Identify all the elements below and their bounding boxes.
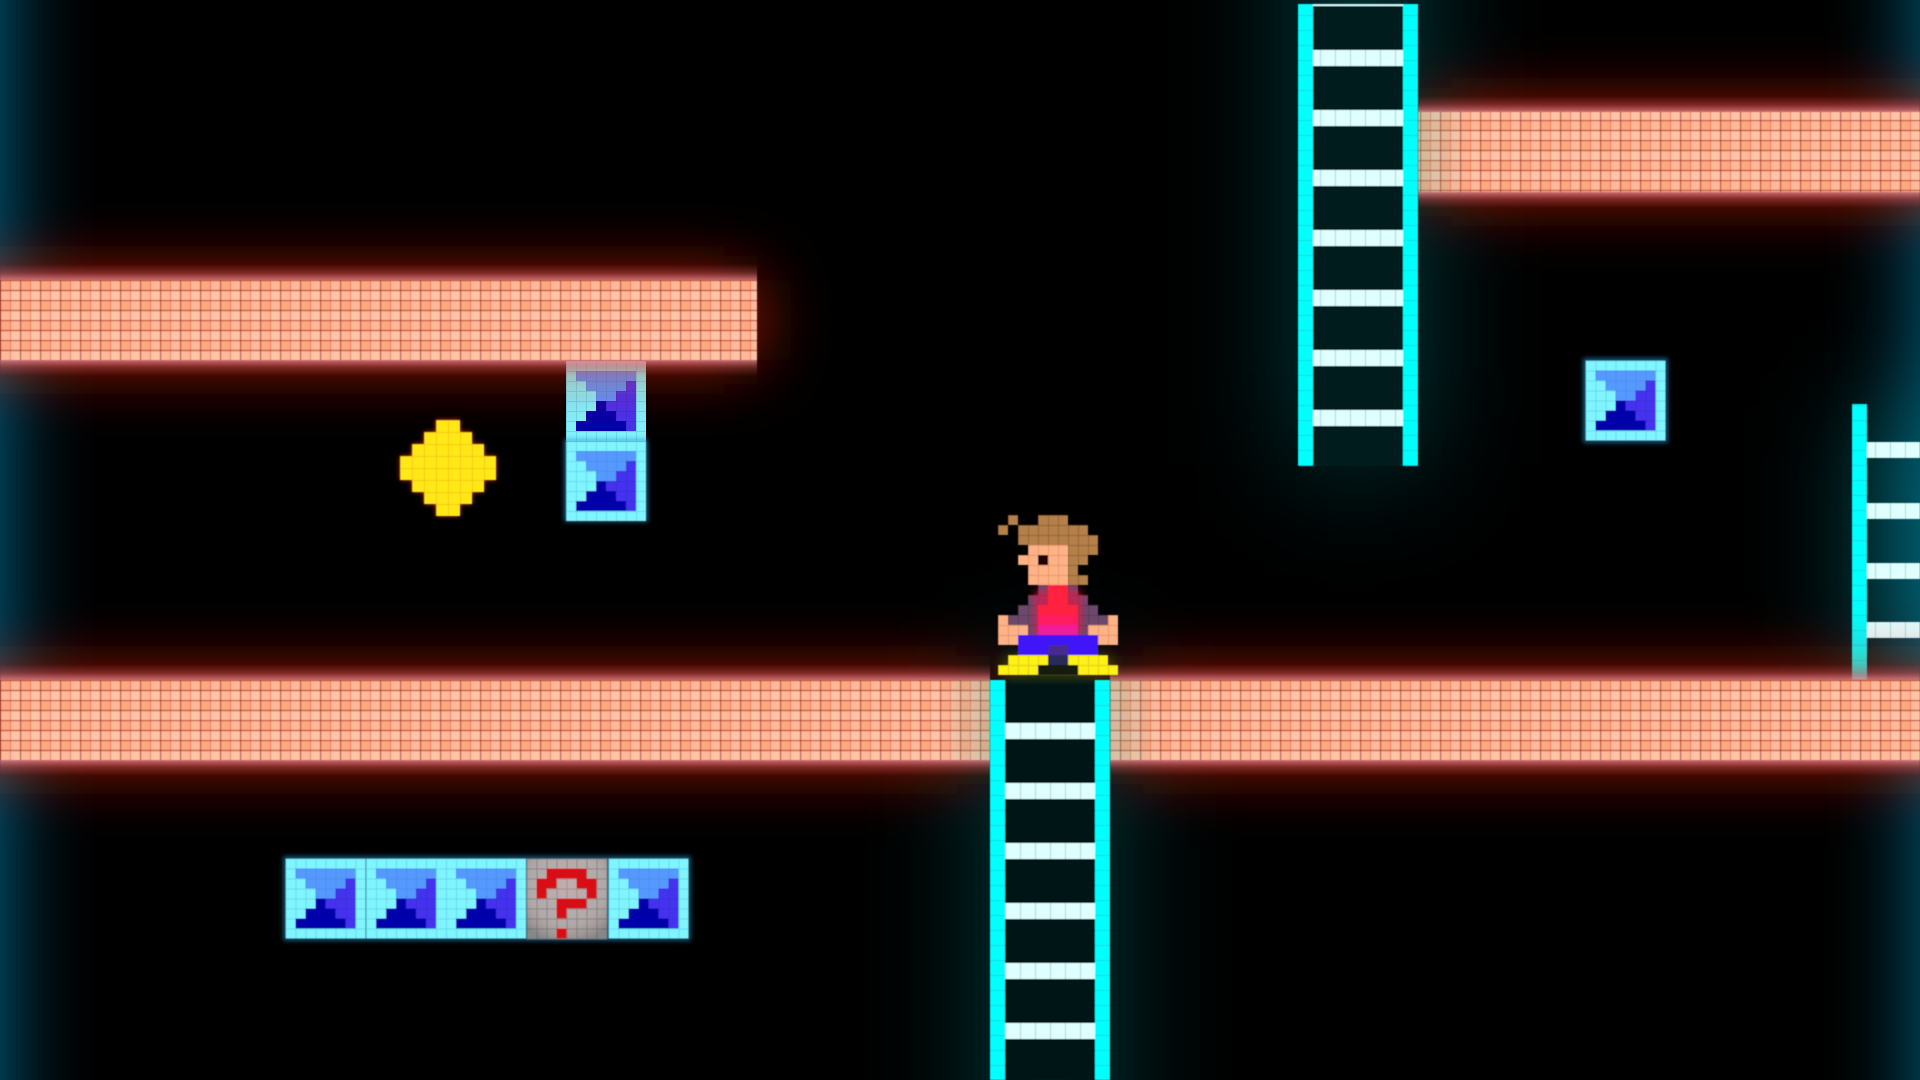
block: stacked lower <box>564 439 648 522</box>
shoes <box>998 655 1118 675</box>
glow: red halo floor right <box>1050 620 1920 820</box>
question block <box>526 858 608 940</box>
platform: main floor left <box>0 664 990 776</box>
block 2 <box>366 858 446 938</box>
platform: main floor right <box>1110 664 1920 776</box>
glow: upper ladder halo <box>1200 0 1516 560</box>
shirt glow <box>1034 590 1082 636</box>
coin <box>400 420 496 516</box>
block: right floating <box>1583 358 1668 443</box>
ladder: far right <box>1852 404 1920 680</box>
glow: red halo floor left <box>0 620 1050 820</box>
eye <box>1038 555 1048 565</box>
face and hands <box>998 545 1118 645</box>
glow: red halo upper left <box>0 220 830 420</box>
shirt <box>1038 585 1078 635</box>
block 1 <box>286 858 366 938</box>
glow: left edge <box>0 0 90 1080</box>
shirt sleeves <box>1008 585 1108 635</box>
block 3 <box>446 858 526 938</box>
hair <box>998 515 1098 585</box>
glow: center ladder halo <box>890 600 1210 1080</box>
character <box>998 515 1118 676</box>
platform: upper left <box>0 264 757 376</box>
glow: right ladder halo <box>1760 320 1920 760</box>
brick row: floating blocks <box>283 856 691 941</box>
block: stacked upper <box>566 361 646 441</box>
block 5 <box>608 858 688 938</box>
glow: right edge <box>1830 0 1920 1080</box>
glow: red halo upper right <box>1360 50 1920 250</box>
ladder: upper <box>1298 4 1418 466</box>
trousers <box>1018 635 1098 675</box>
platform: upper right <box>1418 96 1920 208</box>
ladder: center <box>990 680 1110 1080</box>
